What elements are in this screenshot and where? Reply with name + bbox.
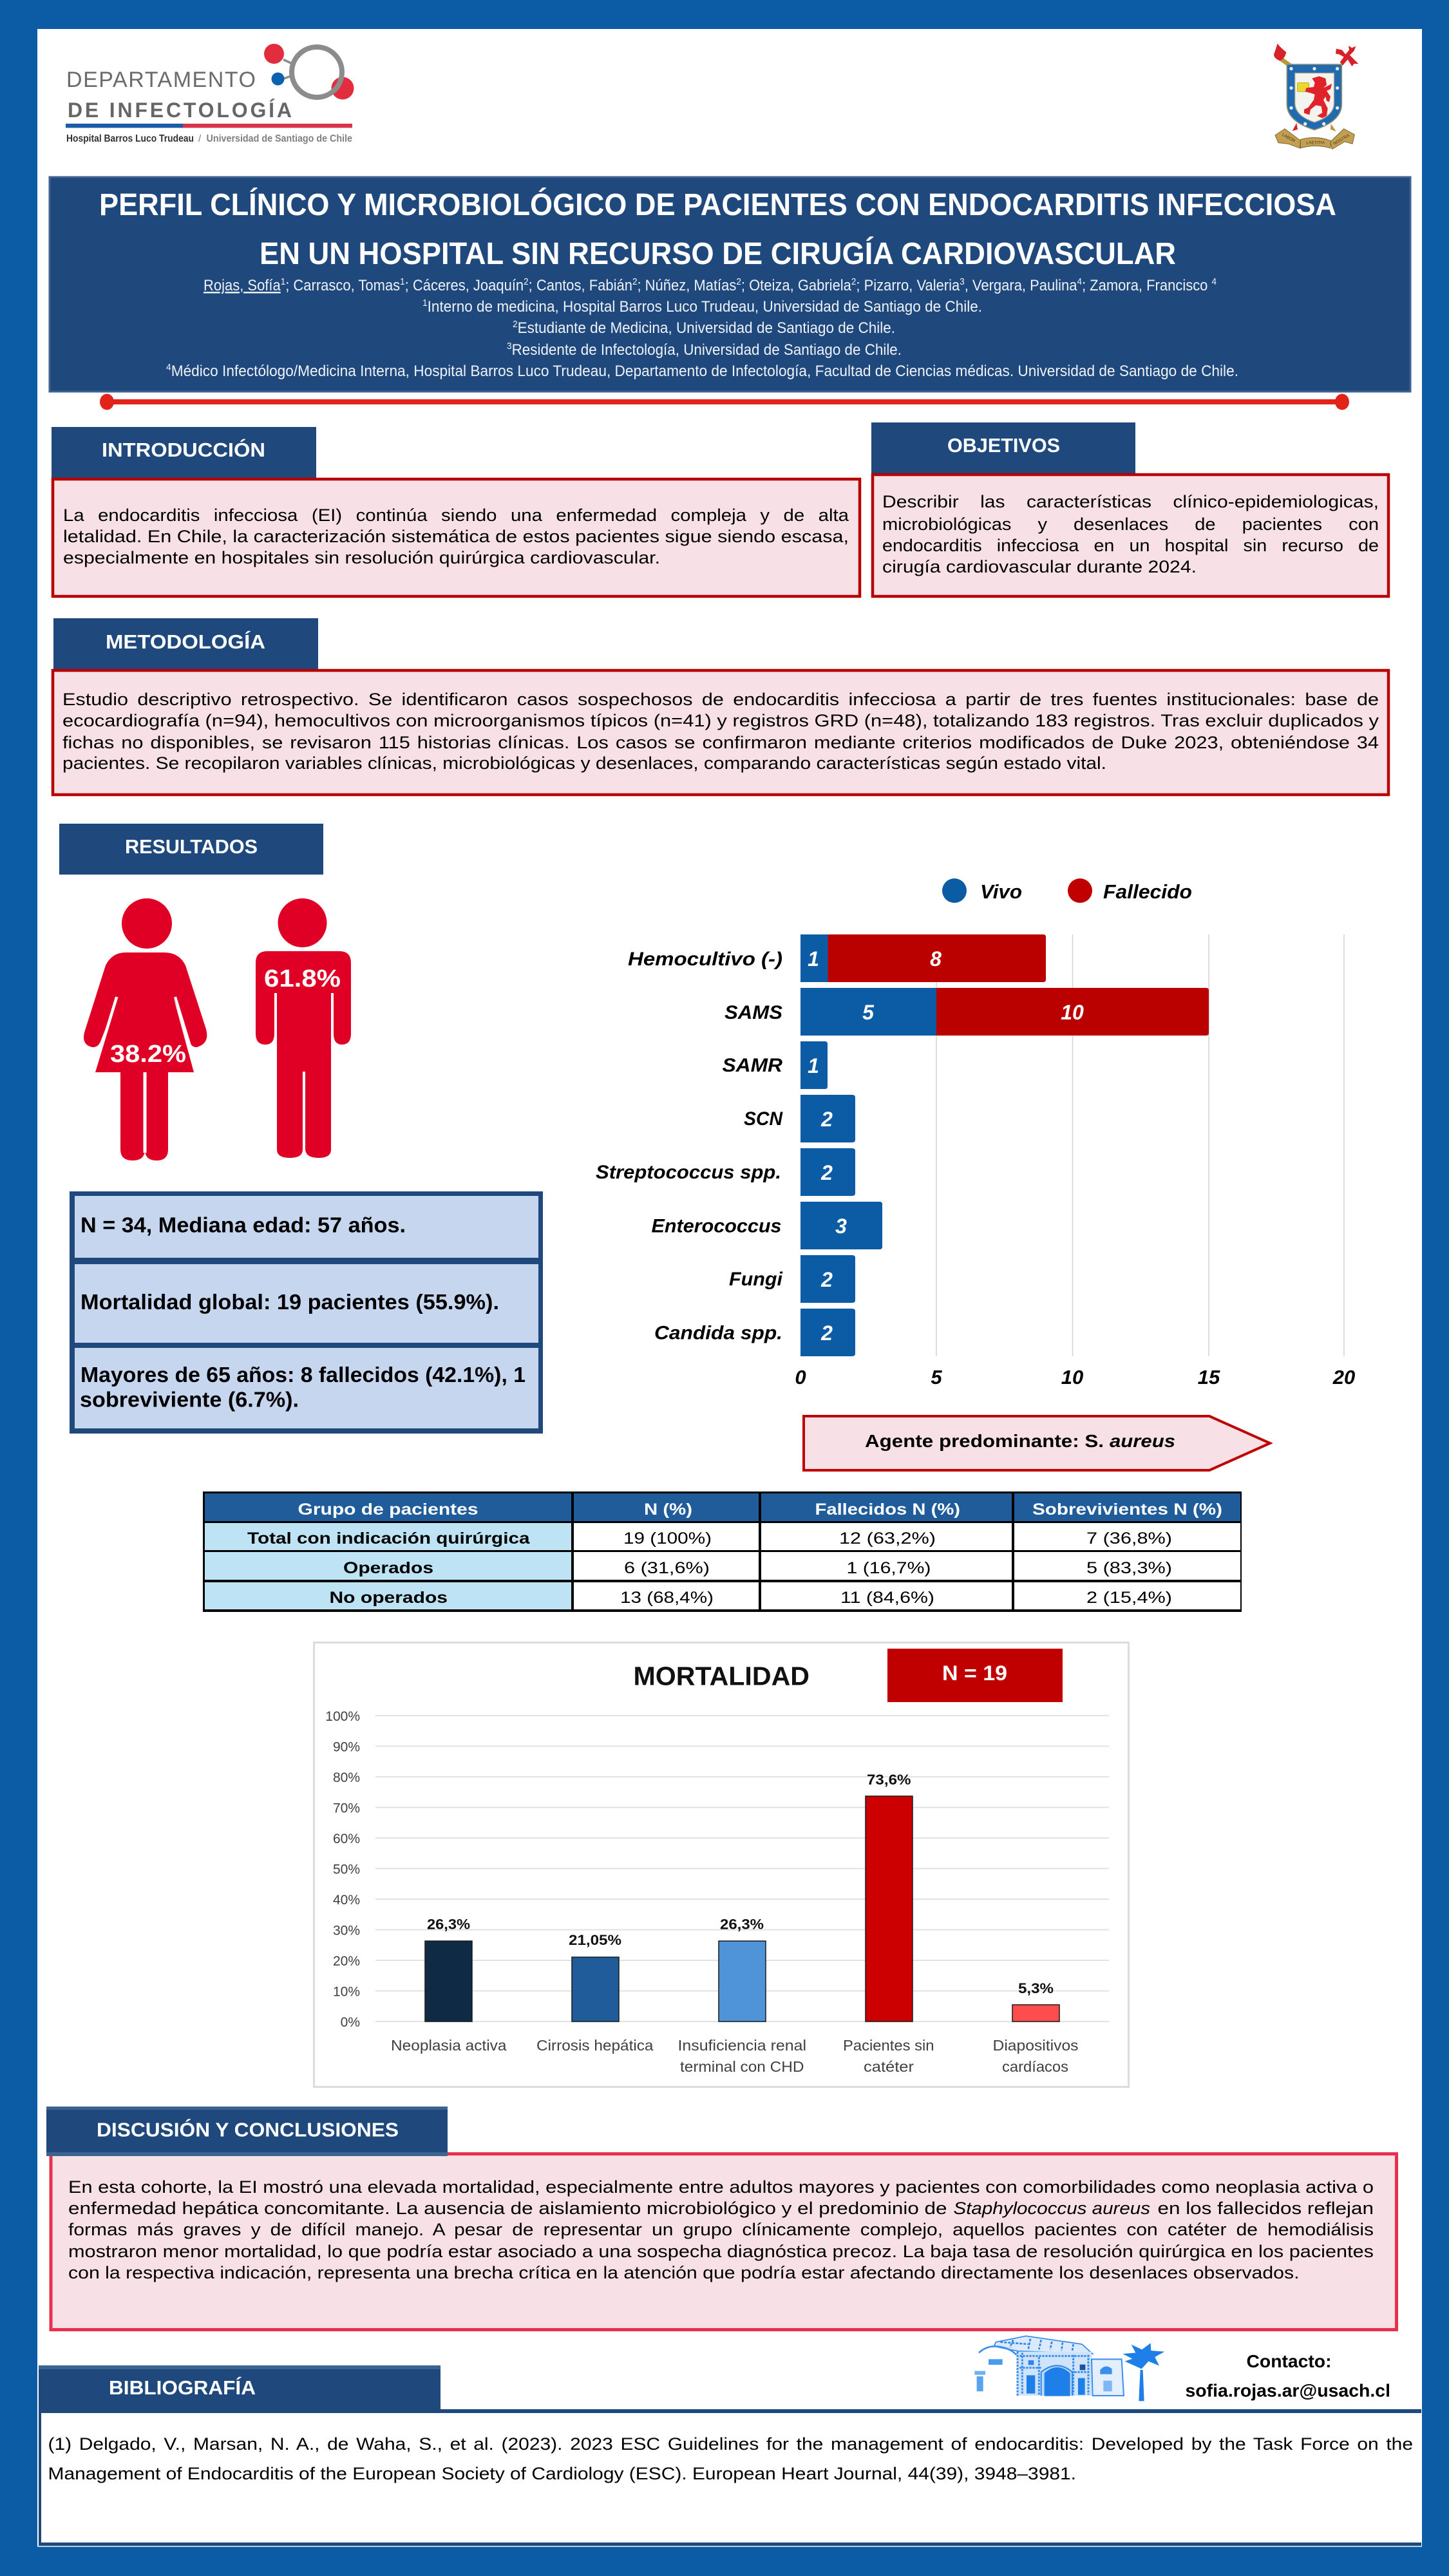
authors and affiliations: 3 xyxy=(507,341,512,352)
logo: Departamento de Infectología: DE INFECTOLOGÍA xyxy=(68,99,292,122)
authors and affiliations: ; Cantos, Fabián xyxy=(529,277,632,294)
bar chart: agents xyxy=(596,934,1355,1388)
bar values: 5 xyxy=(862,1001,875,1024)
authors and affiliations: 3 xyxy=(960,276,965,287)
text: objetivos: microbiológicas y desenlaces de pacientes con xyxy=(882,515,1379,534)
table row: no operados xyxy=(330,1589,1172,1607)
authors and affiliations: 4 xyxy=(1077,276,1082,287)
text: discusión xyxy=(68,2177,1374,2282)
bar values: 1 xyxy=(808,1054,819,1077)
arrow callout: predominant agent xyxy=(804,1416,1270,1470)
text: introducción: La endocarditis infecciosa (EI) continúa siendo una enfermedad compleja y de alta xyxy=(63,506,849,525)
category labels: catéter xyxy=(864,2058,914,2075)
table row: no operados: 13 (68,4%) xyxy=(620,1589,714,1607)
logo: Departamento de Infectología xyxy=(66,44,354,144)
x axis labels: 10 xyxy=(1061,1366,1083,1388)
heading: discusión y conclusiones xyxy=(46,2107,448,2156)
y axis labels: 20% xyxy=(333,1954,360,1969)
bars xyxy=(425,1796,1059,2022)
x axis labels: 20 xyxy=(1332,1366,1355,1388)
text: discusión: Staphylococcus aureus xyxy=(953,2199,1150,2218)
text: discusión: formas más graves y de difícil manejo. A pesar de representar un grupo clínicamente complejo, aquellos pacientes con catéter de hemodiálisis xyxy=(68,2220,1374,2239)
text: metodología: ecocardiografía (n=94), hemocultivos con microorganismos típicos (n=41) y registros GRD (n=48), totalizando 183 registros. Tras excluir duplicados y xyxy=(62,711,1379,730)
heading: objetivos: OBJETIVOS xyxy=(947,434,1060,457)
logo: Departamento de Infectología: DEPARTAMENTO xyxy=(66,68,256,92)
panel: metodología xyxy=(53,618,1388,795)
icon: woman 38.2%: 38.2% xyxy=(110,1041,186,1068)
y axis labels: 70% xyxy=(333,1801,360,1816)
authors and affiliations: 1 xyxy=(400,276,405,287)
authors and affiliations: Estudiante de Medicina, Universidad de Santiago de Chile. xyxy=(518,319,895,337)
authors and affiliations: 1 xyxy=(281,276,285,287)
heading: introducción: INTRODUCCIÓN xyxy=(102,438,265,461)
authors and affiliations: 1 xyxy=(422,298,428,308)
bar values: 2 xyxy=(820,1161,833,1184)
table row: operados: 5 (83,3%) xyxy=(1086,1559,1172,1577)
y axis labels: 100% xyxy=(325,1709,360,1724)
authors and affiliations: Rojas, Sofía xyxy=(204,277,281,294)
table header: N (%) xyxy=(644,1501,692,1519)
category labels: Enterococcus xyxy=(652,1216,782,1236)
bar values xyxy=(427,1772,1054,1996)
bar values: 1 xyxy=(808,947,819,971)
text: reference: (1) Delgado, V., Marsan, N. A., de Waha, S., et al. (2023). 2023 ESC Guidelines for the management of endocarditis: Developed by the Task Force on the xyxy=(48,2434,1413,2454)
text: metodología: fichas no disponibles, se revisaron 115 historias clínicas. Los casos se confirmaron mediante criterios modificados de Duke 2023, obteniéndose 34 xyxy=(62,733,1379,752)
y axis labels xyxy=(325,1709,360,2030)
category labels xyxy=(596,949,783,1343)
text: introducción: especialmente en hospitales sin resolución quirúrgica cardiovascular. xyxy=(63,548,660,567)
table row: operados: 6 (31,6%) xyxy=(624,1559,710,1577)
category labels: terminal con CHD xyxy=(680,2058,804,2075)
bar values: 8 xyxy=(930,947,942,971)
red divider with end dots xyxy=(100,394,1349,410)
category labels: Fungi xyxy=(729,1269,783,1290)
y axis labels: 40% xyxy=(333,1893,360,1908)
table header: Sobrevivientes N (%) xyxy=(1032,1501,1222,1519)
authors and affiliations: Interno de medicina, Hospital Barros Luco Trudeau, Universidad de Santiago de Chile. xyxy=(428,298,982,316)
bar values: 21,05% xyxy=(569,1932,621,1948)
x axis labels xyxy=(795,1366,1355,1388)
icon: university crest xyxy=(1274,44,1358,149)
authors and affiliations: , Vergara, Paulina xyxy=(965,277,1077,294)
category labels: Insuficiencia renal xyxy=(677,2037,806,2054)
category labels: Streptococcus spp. xyxy=(596,1162,781,1183)
text: objetivos xyxy=(882,492,1379,576)
authors and affiliations: 2 xyxy=(524,276,529,287)
icon: hospital building xyxy=(974,2336,1164,2401)
panel: introducción xyxy=(52,427,860,596)
category labels: Hemocultivo (-) xyxy=(628,949,782,970)
authors and affiliations: ; Oteiza, Gabriela xyxy=(741,277,851,294)
text: reference: Management of Endocarditis of the European Society of Cardiology (ESC). European Heart Journal, 44(39), 3948–3981. xyxy=(48,2464,1076,2483)
heading: bibliografía: BIBLIOGRAFÍA xyxy=(109,2376,256,2399)
chart title: MORTALIDAD xyxy=(634,1662,810,1691)
logo: Departamento de Infectología: Hospital Barros Luco Trudeau xyxy=(66,133,194,144)
text: objetivos: cirugía cardiovascular durante 2024. xyxy=(882,557,1197,576)
icon: woman 38.2% xyxy=(84,898,207,1160)
category labels: SCN xyxy=(744,1108,783,1130)
badge: N = 19: N = 19 xyxy=(942,1662,1007,1685)
category labels: Candida spp. xyxy=(654,1323,782,1343)
text: discusión: en los fallecidos reflejan xyxy=(1158,2199,1374,2218)
y axis labels: 60% xyxy=(333,1832,360,1846)
panel: key statistics xyxy=(70,1191,543,1434)
table row: operados: Operados xyxy=(343,1559,433,1577)
title: PERFIL CLÍNICO Y MICROBIOLÓGICO DE PACIENTES CON ENDOCARDITIS INFECCIOSA xyxy=(99,187,1336,222)
category labels: SAMR xyxy=(723,1055,782,1076)
category labels: cardíacos xyxy=(1002,2058,1068,2075)
authors and affiliations: Residente de Infectología, Universidad de Santiago de Chile. xyxy=(512,341,902,359)
y axis labels: 90% xyxy=(333,1740,360,1754)
text: reference xyxy=(48,2434,1413,2483)
bar values: 2 xyxy=(820,1108,833,1131)
bar chart: mortalidad xyxy=(314,1642,1128,2087)
bars xyxy=(800,934,1209,1356)
panel: objetivos xyxy=(871,422,1388,596)
title: EN UN HOSPITAL SIN RECURSO DE CIRUGÍA CARDIOVASCULAR xyxy=(260,236,1176,271)
authors and affiliations: Médico Infectólogo/Medicina Interna, Hospital Barros Luco Trudeau, Departamento de Infectología, Facultad de Ciencias médicas. Universidad de Santiago de Chile. xyxy=(171,363,1238,380)
heading: metodología xyxy=(53,618,318,669)
authors and affiliations: 4 xyxy=(166,362,171,373)
text: discusión: En esta cohorte, la EI mostró una elevada mortalidad, especialmente entre adultos mayores y pacientes con comorbilidades como neoplasia activa o xyxy=(68,2177,1374,2197)
badge: N = 19 xyxy=(887,1649,1063,1702)
panel: discusión y conclusiones xyxy=(46,2107,1396,2330)
text: metodología xyxy=(62,690,1379,773)
heading: resultados xyxy=(59,824,323,875)
panel: key statistics: N = 34, Mediana edad: 57 años. xyxy=(80,1213,406,1236)
heading: resultados: RESULTADOS xyxy=(125,835,258,858)
authors and affiliations: ; Pizarro, Valeria xyxy=(856,277,960,294)
table row: total: 7 (36,8%) xyxy=(1086,1530,1172,1548)
y axis labels: 30% xyxy=(333,1923,360,1938)
arrow callout: predominant agent: Agente predominante: S. xyxy=(865,1431,1104,1451)
table: surgical indication outcomes xyxy=(203,1492,1242,1612)
y axis labels: 10% xyxy=(333,1985,360,1999)
authors and affiliations: 2 xyxy=(513,319,518,330)
bar values: 26,3% xyxy=(427,1917,470,1932)
authors and affiliations: ; Núñez, Matías xyxy=(637,277,736,294)
heading: metodología: METODOLOGÍA xyxy=(106,630,265,653)
contact xyxy=(1185,2351,1390,2401)
category labels: Neoplasia activa xyxy=(391,2037,507,2054)
category labels: Pacientes sin xyxy=(843,2037,934,2054)
icon: man 61.8% xyxy=(256,898,351,1158)
x axis labels: 15 xyxy=(1198,1366,1220,1388)
title banner xyxy=(50,177,1410,392)
table row: no operados: No operados xyxy=(330,1589,448,1607)
y axis labels: 0% xyxy=(341,2015,360,2030)
table row: operados: 1 (16,7%) xyxy=(846,1559,931,1577)
y axis labels: 50% xyxy=(333,1862,360,1877)
contact: Contacto: xyxy=(1247,2351,1332,2371)
authors and affiliations: 2 xyxy=(632,276,637,287)
arrow callout: predominant agent: aureus xyxy=(1110,1431,1175,1451)
text: objetivos: Describir las características clínico-epidemiologicas, xyxy=(882,492,1379,511)
table row: total: 12 (63,2%) xyxy=(839,1530,936,1548)
authors and affiliations: ; Cáceres, Joaquín xyxy=(405,277,524,294)
icon: university crest: LABOR xyxy=(1281,133,1296,144)
bar values xyxy=(808,947,1084,1345)
bar values: 2 xyxy=(820,1321,833,1345)
text: discusión: enfermedad hepática concomitante. La ausencia de aislamiento microbiológico y el predominio de xyxy=(68,2199,947,2218)
authors and affiliations: 4 xyxy=(1212,276,1217,287)
legend: Vivo xyxy=(980,880,1022,903)
table row: total xyxy=(247,1530,1172,1548)
authors and affiliations xyxy=(166,276,1238,380)
category labels: Diapositivos xyxy=(993,2037,1078,2054)
panel: key statistics: sobreviviente (6.7%). xyxy=(80,1387,299,1412)
text: introducción: letalidad. En Chile, la caracterización sistemática de estos pacientes sigue siendo escasa, xyxy=(63,527,849,546)
panel: key statistics: Mortalidad global: 19 pacientes (55.9%). xyxy=(80,1290,499,1314)
y axis labels: 80% xyxy=(333,1770,360,1785)
bar values: 26,3% xyxy=(720,1917,764,1932)
text: metodología: Estudio descriptivo retrospectivo. Se identificaron casos sospechosos de endocarditis infecciosa a partir de tres fuentes institucionales: base de xyxy=(62,690,1379,709)
bar values: 3 xyxy=(835,1215,847,1238)
bar values: 73,6% xyxy=(867,1772,911,1788)
table header: Fallecidos N (%) xyxy=(815,1501,960,1519)
logo: Departamento de Infectología: / xyxy=(198,133,202,144)
panel: key statistics: Mayores de 65 años: 8 fallecidos (42.1%), 1 xyxy=(80,1363,526,1387)
icon: university crest: LAETITIA xyxy=(1306,140,1325,145)
text: metodología: pacientes. Se recopilaron variables clínicas, microbiológicas y desenlaces, comparando características según estado vital. xyxy=(62,753,1106,773)
bar values: 2 xyxy=(820,1268,833,1291)
category labels xyxy=(391,2037,1078,2075)
table header xyxy=(298,1501,1222,1519)
category labels: Cirrosis hepática xyxy=(536,2037,654,2054)
table row: no operados: 2 (15,4%) xyxy=(1086,1589,1172,1607)
authors and affiliations: ; Carrasco, Tomas xyxy=(285,277,400,294)
table header: Grupo de pacientes xyxy=(298,1501,478,1519)
panel: bibliografía xyxy=(37,2365,1422,2546)
table row: operados xyxy=(343,1559,1172,1577)
category labels: SAMS xyxy=(724,1002,782,1023)
authors and affiliations: 2 xyxy=(736,276,741,287)
heading: objetivos xyxy=(871,422,1135,473)
icon: university crest: NOSTRA xyxy=(1332,133,1350,146)
bar values: 5,3% xyxy=(1018,1980,1054,1996)
authors and affiliations: 2 xyxy=(851,276,856,287)
authors and affiliations: ; Zamora, Francisco xyxy=(1082,277,1212,294)
table row: total: Total con indicación quirúrgica xyxy=(247,1530,531,1548)
bar values: 10 xyxy=(1061,1001,1084,1024)
heading: introducción xyxy=(52,427,316,478)
text: introducción xyxy=(63,506,849,567)
table row: no operados: 11 (84,6%) xyxy=(840,1589,934,1607)
x axis labels: 5 xyxy=(931,1366,942,1388)
x axis labels: 0 xyxy=(795,1366,806,1388)
legend xyxy=(942,878,1192,903)
icon: man 61.8%: 61.8% xyxy=(264,965,341,992)
text: objetivos: endocarditis infecciosa en un hospital sin recurso de xyxy=(882,536,1379,555)
heading: discusión y conclusiones: DISCUSIÓN Y CONCLUSIONES xyxy=(97,2117,399,2141)
title xyxy=(99,187,1336,271)
heading: bibliografía xyxy=(39,2365,440,2410)
logo: Departamento de Infectología: Universidad de Santiago de Chile xyxy=(206,133,352,144)
legend: Fallecido xyxy=(1103,880,1192,903)
text: discusión: mostraron menor mortalidad, lo que podría estar asociado a una sospecha diagnóstica precoz. La baja tasa de resolución quirúrgica en los pacientes xyxy=(68,2242,1374,2261)
table row: total: 19 (100%) xyxy=(623,1530,712,1548)
text: discusión: con la respectiva indicación, representa una brecha crítica en la atención que podría estar afectando directamente los desenlaces observados. xyxy=(68,2263,1300,2282)
contact: sofia.rojas.ar@usach.cl xyxy=(1185,2380,1390,2401)
